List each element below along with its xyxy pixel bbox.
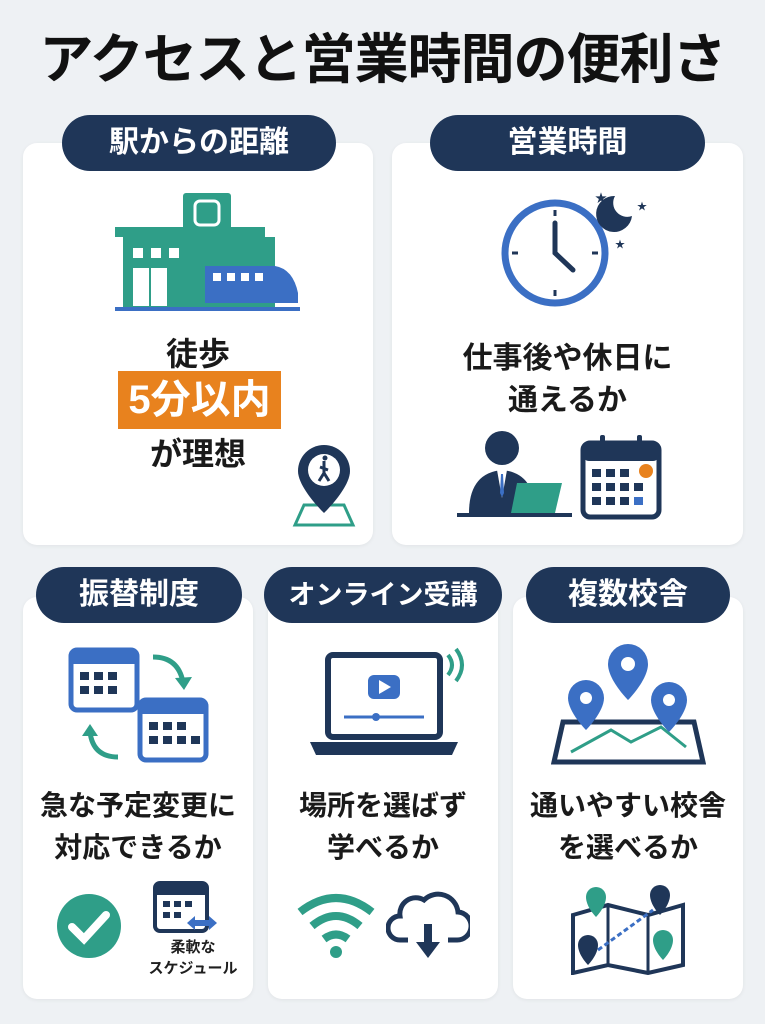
icon: calendar bbox=[580, 435, 662, 520]
heading: multiple campuses: 複数校舎 bbox=[568, 578, 688, 611]
icon: flexible schedule bbox=[149, 881, 237, 977]
icon: wifi bbox=[298, 894, 374, 958]
text: ideal: が理想 bbox=[150, 436, 246, 472]
text: after work: 通えるか bbox=[508, 384, 627, 417]
heading: online: オンライン受講 bbox=[288, 580, 478, 610]
text: anywhere bbox=[299, 790, 467, 863]
text: sudden changes bbox=[40, 790, 236, 863]
text: convenient campus bbox=[530, 790, 726, 863]
panel: station distance bbox=[23, 143, 373, 545]
icon: swap calendars bbox=[68, 648, 208, 762]
icon: route map bbox=[571, 885, 685, 975]
heading: multiple campuses bbox=[526, 567, 730, 623]
heading: hours: 営業時間 bbox=[508, 126, 628, 159]
panel: hours bbox=[392, 143, 743, 545]
heading: station distance bbox=[62, 115, 336, 171]
text: after work: 仕事後や休日に bbox=[462, 342, 672, 375]
text: anywhere: 学べるか bbox=[327, 832, 439, 863]
icon: flexible schedule: 柔軟な bbox=[170, 939, 216, 956]
icon: cloud download bbox=[386, 892, 470, 958]
text: convenient campus: を選べるか bbox=[558, 832, 698, 863]
icon: clock and moon bbox=[502, 191, 647, 306]
icon: laptop video bbox=[310, 648, 464, 755]
icon: clock and moon: ★ bbox=[615, 240, 625, 251]
icon: worker at laptop bbox=[457, 431, 572, 517]
callout: 5 minutes: 5分以内 bbox=[128, 378, 271, 422]
icon: map pins bbox=[551, 644, 706, 764]
text: anywhere: 場所を選ばず bbox=[299, 790, 467, 821]
heading: online bbox=[264, 567, 502, 623]
text: walking: 徒歩 bbox=[166, 336, 230, 372]
icon: clock and moon: ★ bbox=[637, 202, 647, 213]
icon: walk pin bbox=[292, 445, 356, 526]
heading: station distance: 駅からの距離 bbox=[109, 126, 289, 159]
icon: station bbox=[115, 193, 300, 311]
text: convenient campus: 通いやすい校舎 bbox=[530, 790, 726, 821]
heading: makeup lessons bbox=[36, 567, 242, 623]
text: after work bbox=[462, 342, 672, 417]
title: アクセスと営業時間の便利さ bbox=[39, 30, 726, 90]
callout: 5 minutes bbox=[118, 371, 281, 429]
text: sudden changes: 急な予定変更に bbox=[40, 790, 236, 821]
panel: makeup lessons bbox=[23, 597, 253, 999]
icon: flexible schedule: スケジュール bbox=[149, 960, 237, 977]
heading: hours bbox=[430, 115, 705, 171]
heading: makeup lessons: 振替制度 bbox=[79, 578, 199, 611]
panel: online bbox=[268, 597, 498, 999]
icon: clock and moon: ★ bbox=[595, 191, 607, 205]
text: sudden changes: 対応できるか bbox=[54, 832, 222, 863]
icon: check bbox=[57, 894, 121, 958]
panel: multiple campuses bbox=[513, 597, 743, 999]
